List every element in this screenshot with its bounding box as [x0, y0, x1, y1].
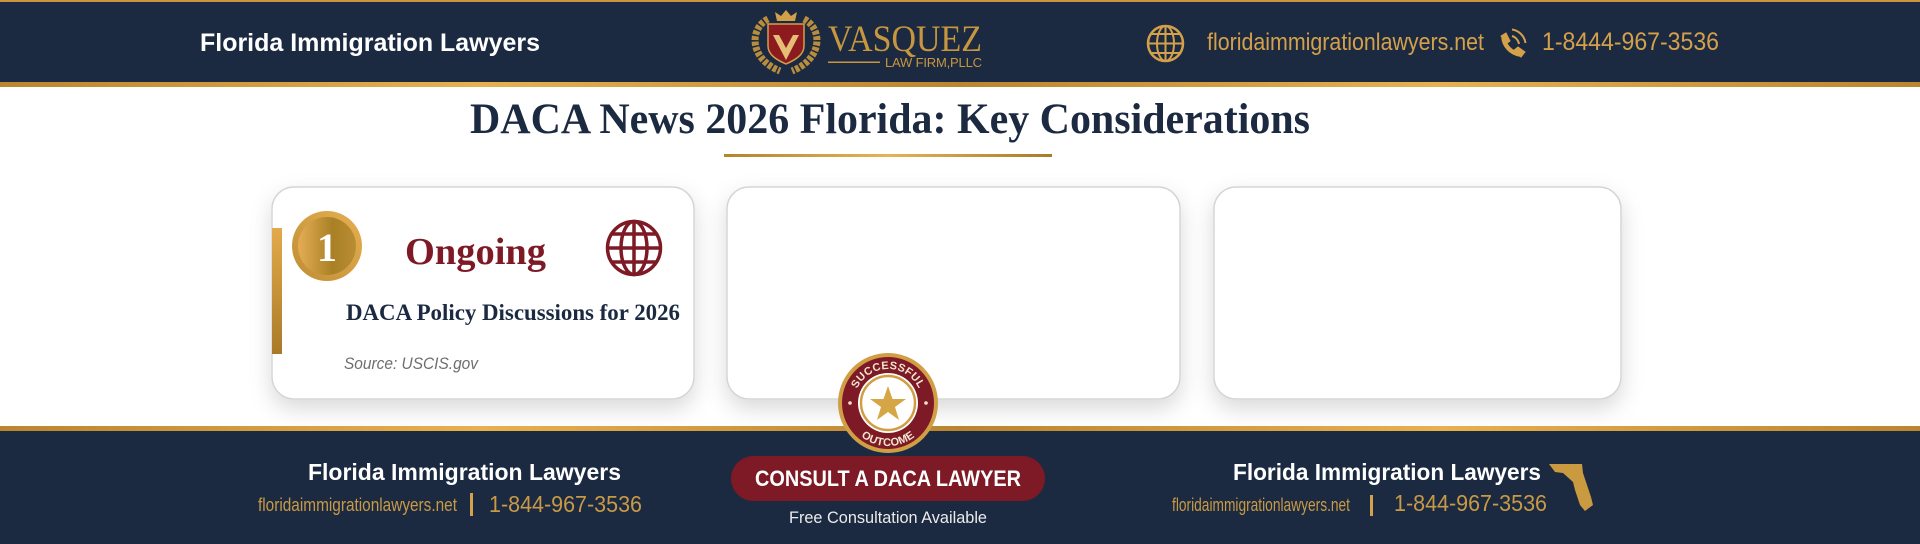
footer band [0, 426, 1920, 544]
number medal: 1 [317, 225, 337, 270]
card subheading: DACA Policy Discussions for 2026 [346, 300, 680, 325]
footer left block: floridaimmigrationlawyers.net [258, 495, 457, 515]
logo wordmark: VASQUEZ [828, 19, 982, 60]
logo shield [768, 24, 804, 64]
card source: Source: USCIS.gov [344, 354, 479, 373]
panel: card 2 [727, 187, 1180, 399]
icon: header globe [1148, 26, 1183, 61]
footer left block: Florida Immigration Lawyers [308, 459, 621, 485]
logo [755, 10, 982, 71]
card heading: Ongoing [405, 231, 546, 273]
badge top text: SUCCESSFUL [852, 361, 924, 388]
footer left block [258, 459, 642, 517]
badge: successful outcome [838, 353, 938, 453]
icon: Florida map [1549, 464, 1593, 511]
footer right block [1172, 459, 1547, 516]
badge star [870, 386, 906, 420]
badge bottom text: OUTCOME [862, 430, 914, 446]
header band [0, 0, 1920, 87]
header firm name: Florida Immigration Lawyers [200, 29, 540, 57]
panel: card 3 [1214, 187, 1621, 399]
header website: floridaimmigrationlawyers.net [1207, 29, 1484, 56]
icon: card globe [608, 222, 660, 274]
badge side dots [848, 401, 928, 405]
call to action button: CONSULT A DACA LAWYER [755, 466, 1021, 491]
title: DACA News 2026 Florida: Key Considerations [470, 96, 1310, 143]
icon: header phone [1501, 30, 1526, 57]
logo wreath [755, 19, 817, 71]
consultation note: Free Consultation Available [789, 508, 987, 527]
number medal [292, 211, 362, 281]
footer right block: Florida Immigration Lawyers [1233, 459, 1541, 485]
logo subtitle: LAW FIRM,PLLC [885, 55, 982, 70]
header phone number: 1-8444-967-3536 [1542, 28, 1719, 56]
title underline [724, 154, 1052, 157]
logo crown [775, 10, 797, 21]
footer right block: 1-844-967-3536 [1394, 490, 1547, 516]
panel: card 1 [272, 187, 694, 399]
footer left block: 1-844-967-3536 [489, 491, 642, 517]
card accent bar [272, 228, 282, 354]
footer right block: floridaimmigrationlawyers.net [1172, 495, 1350, 515]
call to action button [731, 456, 1045, 501]
